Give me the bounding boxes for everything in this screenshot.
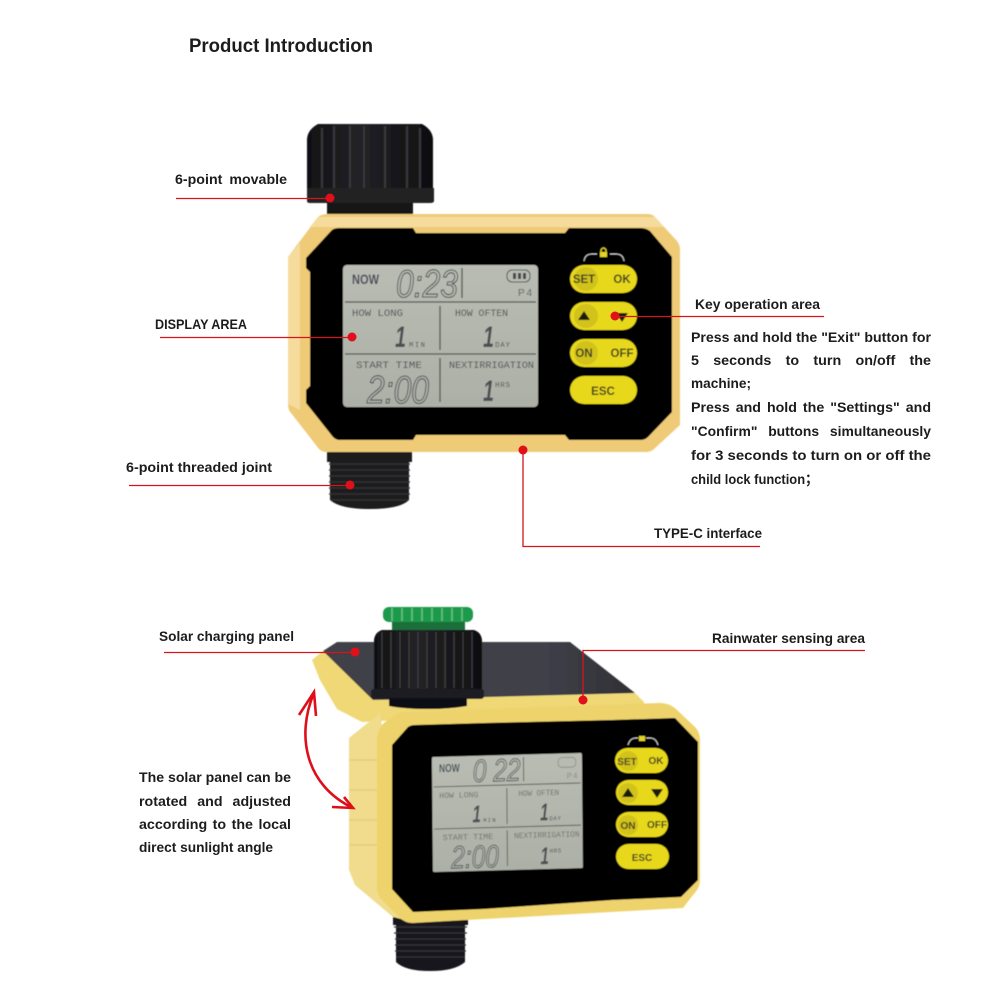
LCD display: MIN [409,342,425,350]
title: Product Introduction [189,36,373,57]
arrow: solar panel rotation [299,692,353,808]
LCD display: 1 [540,800,549,827]
text block: key operation instructions: machine; [691,375,751,391]
callout: rainwater sensing area [578,630,865,704]
top threaded knob [307,124,434,216]
button: ESC [616,844,669,869]
solar panel yellow rim [312,651,644,722]
LCD display: 2:00 [366,369,429,412]
LCD display: START TIME [443,833,494,843]
LCD display: NOW [439,762,460,775]
green cap [383,607,473,632]
button: ON / OFF: OFF [610,348,634,360]
callout: TYPE-C interface [518,446,762,546]
LCD display: MIN [483,817,496,824]
bottom device: angled view with solar panel [312,607,700,971]
black knob [371,630,484,709]
text block: solar panel note [139,769,291,855]
text block: solar panel note: according to the local [139,816,291,832]
LCD display: 1 [483,321,494,354]
LCD display: P4 [567,771,578,781]
callout: solar charging panel [159,628,360,656]
text block: key operation instructions [691,329,932,488]
text block: solar panel note: rotated and adjusted [139,793,291,809]
text block: key operation instructions: Press and hold the "Settings" and [691,399,931,415]
LCD display: HOW LONG [352,308,403,320]
button: up / down [570,302,637,330]
callout: 6-point threaded joint: 6-point threaded joint [126,459,272,475]
button: ON / OFF: ON [575,348,593,360]
child lock icon [628,736,658,745]
callout: TYPE-C interface: TYPE-C interface [654,525,762,541]
LCD display [343,263,538,412]
callout: solar charging panel: Solar charging panel [159,628,294,644]
LCD display: NEXTIRRIGATION [449,360,534,372]
LCD display: 2:00 [450,838,499,876]
callout: display area [155,316,356,342]
button: up / down [616,780,668,805]
button: SET / OK: OK [648,756,664,767]
child lock icon [584,248,624,261]
LCD display: HOW LONG [439,791,479,801]
LCD display: 1 [483,375,494,408]
button: ON / OFF [570,339,637,367]
callout: rainwater sensing area: Rainwater sensing area [712,630,865,646]
LCD display: HOW OFTEN [455,308,508,320]
callout: key operation area: Key operation area [695,296,820,312]
LCD display: 0:23 [396,263,458,306]
LCD display: 1 [395,321,406,354]
LCD display: HOW OFTEN [518,789,559,799]
LCD display: START TIME [356,360,422,372]
callout: 6-point movable [175,171,334,202]
text block: key operation instructions: Press and hold the "Exit" button for [691,329,932,345]
LCD display [432,750,583,876]
black face panel [392,718,698,912]
LCD display: 1 [472,802,481,829]
button: ON / OFF [616,812,668,837]
button: ON / OFF: OFF [647,820,667,831]
button: ON / OFF: ON [620,821,636,832]
LCD display: NOW [352,271,380,287]
button: SET / OK: SET [573,274,595,286]
body side [349,713,413,922]
LCD display: HRS [495,382,510,390]
bottom threaded connector [327,450,412,509]
button: ESC [570,376,637,404]
text block: key operation instructions: "Confirm" buttons simultaneously [691,423,931,439]
callout: key operation area [610,296,824,320]
top device: front view of irrigation timer [288,124,680,509]
LCD display: NEXTIRRIGATION [514,830,580,841]
solar charging panel [323,642,635,700]
button: SET / OK [570,265,637,293]
text block: solar panel note: The solar panel can be [139,769,291,785]
callout: 6-point threaded joint [126,459,354,490]
text block: key operation instructions: 5 seconds to turn on/off the [691,352,931,368]
button: SET / OK [615,748,668,773]
LCD display: HRS [550,847,562,855]
button: SET / OK: OK [613,274,631,286]
text block: key operation instructions: for 3 seconds to turn on or off the [691,447,931,463]
button: SET / OK: SET [617,757,637,768]
text block: solar panel note: direct sunlight angle [139,839,273,855]
bottom threaded connector [393,915,468,971]
LCD display: DAY [495,342,510,350]
button: ESC: ESC [591,386,615,398]
callout: 6-point movable: 6-point movable [175,171,287,187]
LCD display: P4 [518,288,532,299]
LCD display: 0 22 [473,752,521,789]
LCD display: DAY [549,815,561,822]
device body [288,214,680,452]
LCD display: 1 [540,844,549,870]
callout: display area: DISPLAY AREA [155,316,247,332]
body front [377,703,700,923]
button: ESC: ESC [632,853,652,864]
text block: key operation instructions: child lock function； [691,471,818,488]
black face panel [306,228,672,440]
